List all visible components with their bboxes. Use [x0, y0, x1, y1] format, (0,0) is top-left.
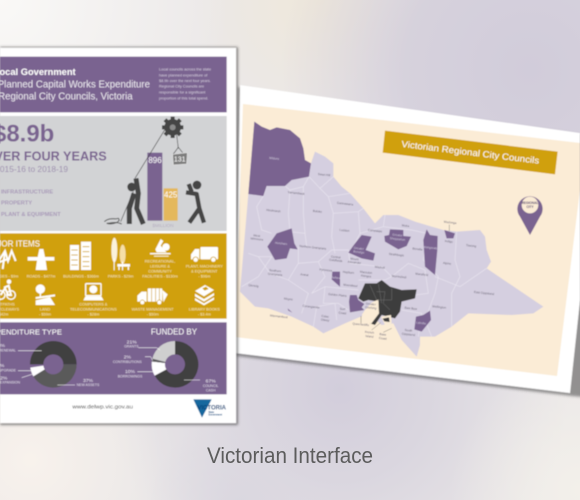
south map labels: French	[365, 330, 375, 335]
Phillip Island	[381, 315, 392, 325]
icon: library books	[195, 285, 214, 305]
logo: Victoria State Government: VICTORIA	[197, 405, 227, 411]
north map labels: Mildura	[269, 156, 280, 161]
icon: rope and hanging weight: 131	[174, 157, 186, 164]
map title banner	[383, 131, 558, 174]
item labels: - $50m	[147, 313, 159, 317]
heading: Regional City Councils, Victoria	[0, 91, 133, 102]
south map labels: Gippsland	[402, 332, 416, 337]
south map labels: Indigo	[445, 239, 453, 244]
donut labels: 21%	[127, 340, 137, 346]
intro text: $8.9b over the next four years.	[159, 79, 211, 83]
south map labels: Corangamite	[302, 304, 320, 310]
south map labels: Golden Plains	[328, 292, 347, 298]
legend: INFRASTRUCTURE	[1, 189, 53, 195]
Warrnambool	[288, 308, 292, 313]
south map labels: Glenelg	[248, 283, 259, 288]
icon: bridge	[0, 251, 16, 269]
panel: total spend	[0, 116, 227, 231]
south map labels: Queenscliffe	[352, 321, 370, 327]
Bass Coast	[383, 317, 390, 322]
south map labels: Murrindindi	[392, 274, 407, 279]
intro text: have planned expenditure of	[159, 73, 208, 77]
heading	[0, 67, 150, 102]
item labels: LEISURE &	[150, 264, 170, 268]
panel: expenditure and funding	[0, 322, 227, 394]
map: regions south (coordinates from lower crop)	[248, 220, 495, 341]
south map labels: Wimmera	[250, 236, 264, 242]
item labels: WASTE MANAGEMENT	[132, 308, 174, 312]
south map labels: Northern Grampians	[299, 244, 327, 251]
labels on regional cities: Wangaratta	[423, 245, 439, 250]
labels on regional cities: Shepparton	[390, 236, 406, 242]
donut chart: funded by	[152, 341, 198, 388]
icon: land	[36, 284, 55, 305]
Greater Bendigo	[348, 235, 375, 261]
legend: PLANT & EQUIPMENT	[1, 212, 61, 218]
item labels: COMMUNITY	[148, 269, 172, 273]
map card	[235, 85, 580, 397]
south map labels: Alexander	[348, 260, 361, 265]
south map labels: Bass	[379, 332, 387, 337]
panel: expenditure and funding: BORROWINGS	[118, 374, 143, 378]
north map labels: Swan Hill	[318, 172, 331, 177]
upper poster content	[0, 57, 227, 231]
legend	[1, 189, 61, 218]
highlighted regional city: Mildura	[248, 122, 311, 196]
south map labels: South	[404, 328, 413, 333]
left poster sheet	[0, 47, 238, 425]
labels on regional cities: Greater	[354, 246, 364, 251]
south map labels: Island	[365, 334, 374, 339]
callout leaders	[361, 225, 449, 332]
north map labels: Hindmarsh	[266, 208, 281, 213]
south map labels: Coast	[379, 336, 387, 341]
donut labels: 10%	[125, 369, 136, 375]
south map labels: Warrnambool	[270, 313, 288, 319]
panel: expenditure and funding: EXPANSION	[0, 381, 20, 385]
metro boundaries	[370, 283, 392, 310]
panel: expenditure and funding: CONTRIBUTIONS	[113, 360, 142, 364]
labels on regional cities: Bendigo	[353, 249, 365, 255]
south map labels: Moyne	[284, 297, 293, 301]
south map labels: Otway	[321, 318, 330, 322]
south map labels: Colac	[321, 314, 330, 319]
bar chart: 425	[164, 191, 178, 200]
icon: laptop	[83, 284, 104, 300]
north map labels: Buloke	[313, 209, 323, 214]
map: regions north (coordinates from upper crop)	[240, 122, 558, 357]
south map labels: Greater	[366, 301, 376, 307]
south map labels: Goldfields	[329, 258, 343, 263]
item labels: LIBRARY BOOKS	[189, 308, 220, 312]
Greater Shepparton	[384, 229, 411, 249]
donut labels	[0, 340, 216, 384]
item labels: TELECOMMUNICATIONS	[70, 308, 117, 312]
intro text: proportion of this total spend.	[159, 96, 208, 100]
south map labels: Baw Baw	[404, 306, 418, 311]
south map labels: East Gippsland	[474, 290, 495, 296]
item labels: PARKS - $29m	[108, 274, 134, 278]
bar chart	[147, 153, 178, 228]
item labels: & EQUIPMENT	[191, 269, 218, 273]
item labels: FACILITIES - $130m	[142, 274, 178, 278]
icon: worker helping	[186, 181, 204, 223]
south map labels: West	[253, 233, 261, 238]
donut chart: expenditure type	[30, 341, 77, 388]
heading: Planned Capital Works Expenditure	[0, 79, 150, 90]
caption: Victorian Interface	[207, 443, 373, 468]
south map labels: Macedon	[360, 270, 373, 275]
legend: PROPERTY	[1, 201, 32, 207]
bar chart: 896	[148, 156, 162, 165]
logo: Victoria State Government: State	[208, 411, 215, 414]
leader lines	[18, 348, 200, 385]
intro text: Regional City Councils are	[159, 85, 204, 89]
south map labels: Hepburn	[343, 270, 355, 275]
south map labels: Ranges	[361, 273, 372, 279]
Wodonga	[444, 230, 455, 238]
labels on regional cities: Ballarat	[331, 275, 342, 280]
donut labels: 2%	[124, 355, 131, 361]
intro text: responsible for a significant	[159, 90, 206, 94]
icon: regional city pin	[517, 196, 543, 235]
south map labels: Moorabool	[343, 283, 358, 288]
bar chart: $MILLION	[152, 223, 174, 228]
intro text	[159, 68, 211, 100]
north map labels: Yarriambiack	[287, 190, 305, 196]
panel: expenditure and funding: CASH	[206, 388, 216, 392]
panel: major items	[0, 233, 227, 319]
north map labels	[266, 156, 354, 214]
south map labels: Campaspe	[368, 228, 383, 233]
icon: roads	[28, 249, 54, 270]
item labels: - $96m	[198, 274, 210, 278]
south map labels: Wodonga	[444, 220, 457, 225]
website: www.delwp.vic.gov.au	[72, 404, 133, 410]
logo: Victoria State Government	[193, 399, 227, 418]
item labels: - $3.4m	[198, 313, 211, 317]
item labels: - $28m	[87, 313, 99, 317]
Horsham	[267, 228, 298, 260]
icon: regional city pin: REGIONAL	[522, 201, 538, 205]
south map labels: Alpine	[443, 261, 452, 266]
labels on regional cities	[275, 232, 439, 326]
south map labels: Central	[331, 255, 341, 260]
item labels: COMPUTERS &	[79, 303, 108, 307]
south map labels: Wellington	[432, 304, 447, 310]
intro text: Local councils across the state	[159, 68, 211, 72]
south map labels: Southern	[269, 268, 282, 273]
item labels: BUILDINGS - $366m	[63, 274, 99, 278]
icon: truck	[191, 247, 218, 262]
item labels: PLANT, MACHINERY	[186, 265, 223, 269]
map title banner: Victorian Regional City Councils	[401, 139, 540, 166]
heading: funded by: FUNDED BY	[151, 327, 198, 336]
south map labels: Pyrenees	[319, 267, 333, 273]
panel: header	[0, 57, 227, 112]
municipality boundaries	[242, 163, 487, 337]
south map labels: Coast	[338, 311, 347, 315]
icon: swimmer	[150, 239, 171, 257]
state of Victoria outline	[240, 122, 543, 357]
icon: regional city pin: CITY	[526, 205, 534, 209]
donut labels: 67%	[206, 378, 216, 384]
south map labels: Mount	[350, 257, 359, 261]
item labels: LAND	[40, 308, 50, 312]
south map labels: Strathbogie	[389, 252, 405, 257]
icon: buildings	[70, 242, 91, 270]
north map labels: Gannawarra	[337, 201, 354, 207]
icon: parks	[111, 238, 130, 270]
donut labels: 37%	[83, 378, 94, 384]
panel: expenditure and funding: COUNCIL	[203, 384, 219, 388]
south map labels: Surf	[340, 307, 346, 311]
icon: cyclist	[0, 280, 15, 299]
Greater Geelong	[349, 295, 364, 312]
item labels: ROADS - $477m	[27, 274, 55, 278]
item labels: RECREATIONAL,	[145, 260, 175, 264]
item labels: - $59m	[39, 313, 51, 317]
logo: Victoria State Government: Government	[208, 414, 222, 417]
labels on regional cities: Latrobe	[416, 320, 427, 326]
south map labels: Benalla	[412, 246, 423, 252]
lower poster content	[0, 233, 227, 418]
south map labels: Geelong	[365, 305, 377, 310]
south map labels: Mitchell	[375, 265, 385, 270]
item labels	[0, 260, 223, 317]
south map labels	[248, 220, 495, 341]
panel: expenditure and funding: NEW ASSETS	[77, 383, 100, 387]
south map labels: Moira	[402, 223, 410, 228]
Port Phillip Bay	[362, 299, 379, 324]
Melbourne metropolitan area	[358, 280, 417, 325]
icon: worker pulling rope	[104, 178, 143, 224]
south map labels: Mansfield	[415, 272, 429, 277]
icon: rope and hanging weight	[135, 129, 187, 178]
panel: expenditure and funding: GRANTS	[124, 345, 139, 349]
icon: garbage truck	[137, 288, 168, 305]
Ballarat	[332, 272, 341, 288]
Latrobe	[414, 311, 431, 332]
south map labels: Loddon	[339, 228, 350, 233]
icon: gear	[162, 117, 183, 138]
south map labels: Ararat	[300, 272, 309, 277]
south map labels: Grampians	[268, 272, 283, 277]
labels on regional cities: Horsham	[275, 241, 288, 246]
south map labels: Towong	[466, 243, 477, 248]
labels on regional cities: Greater	[392, 232, 403, 238]
Wangaratta	[423, 229, 438, 275]
